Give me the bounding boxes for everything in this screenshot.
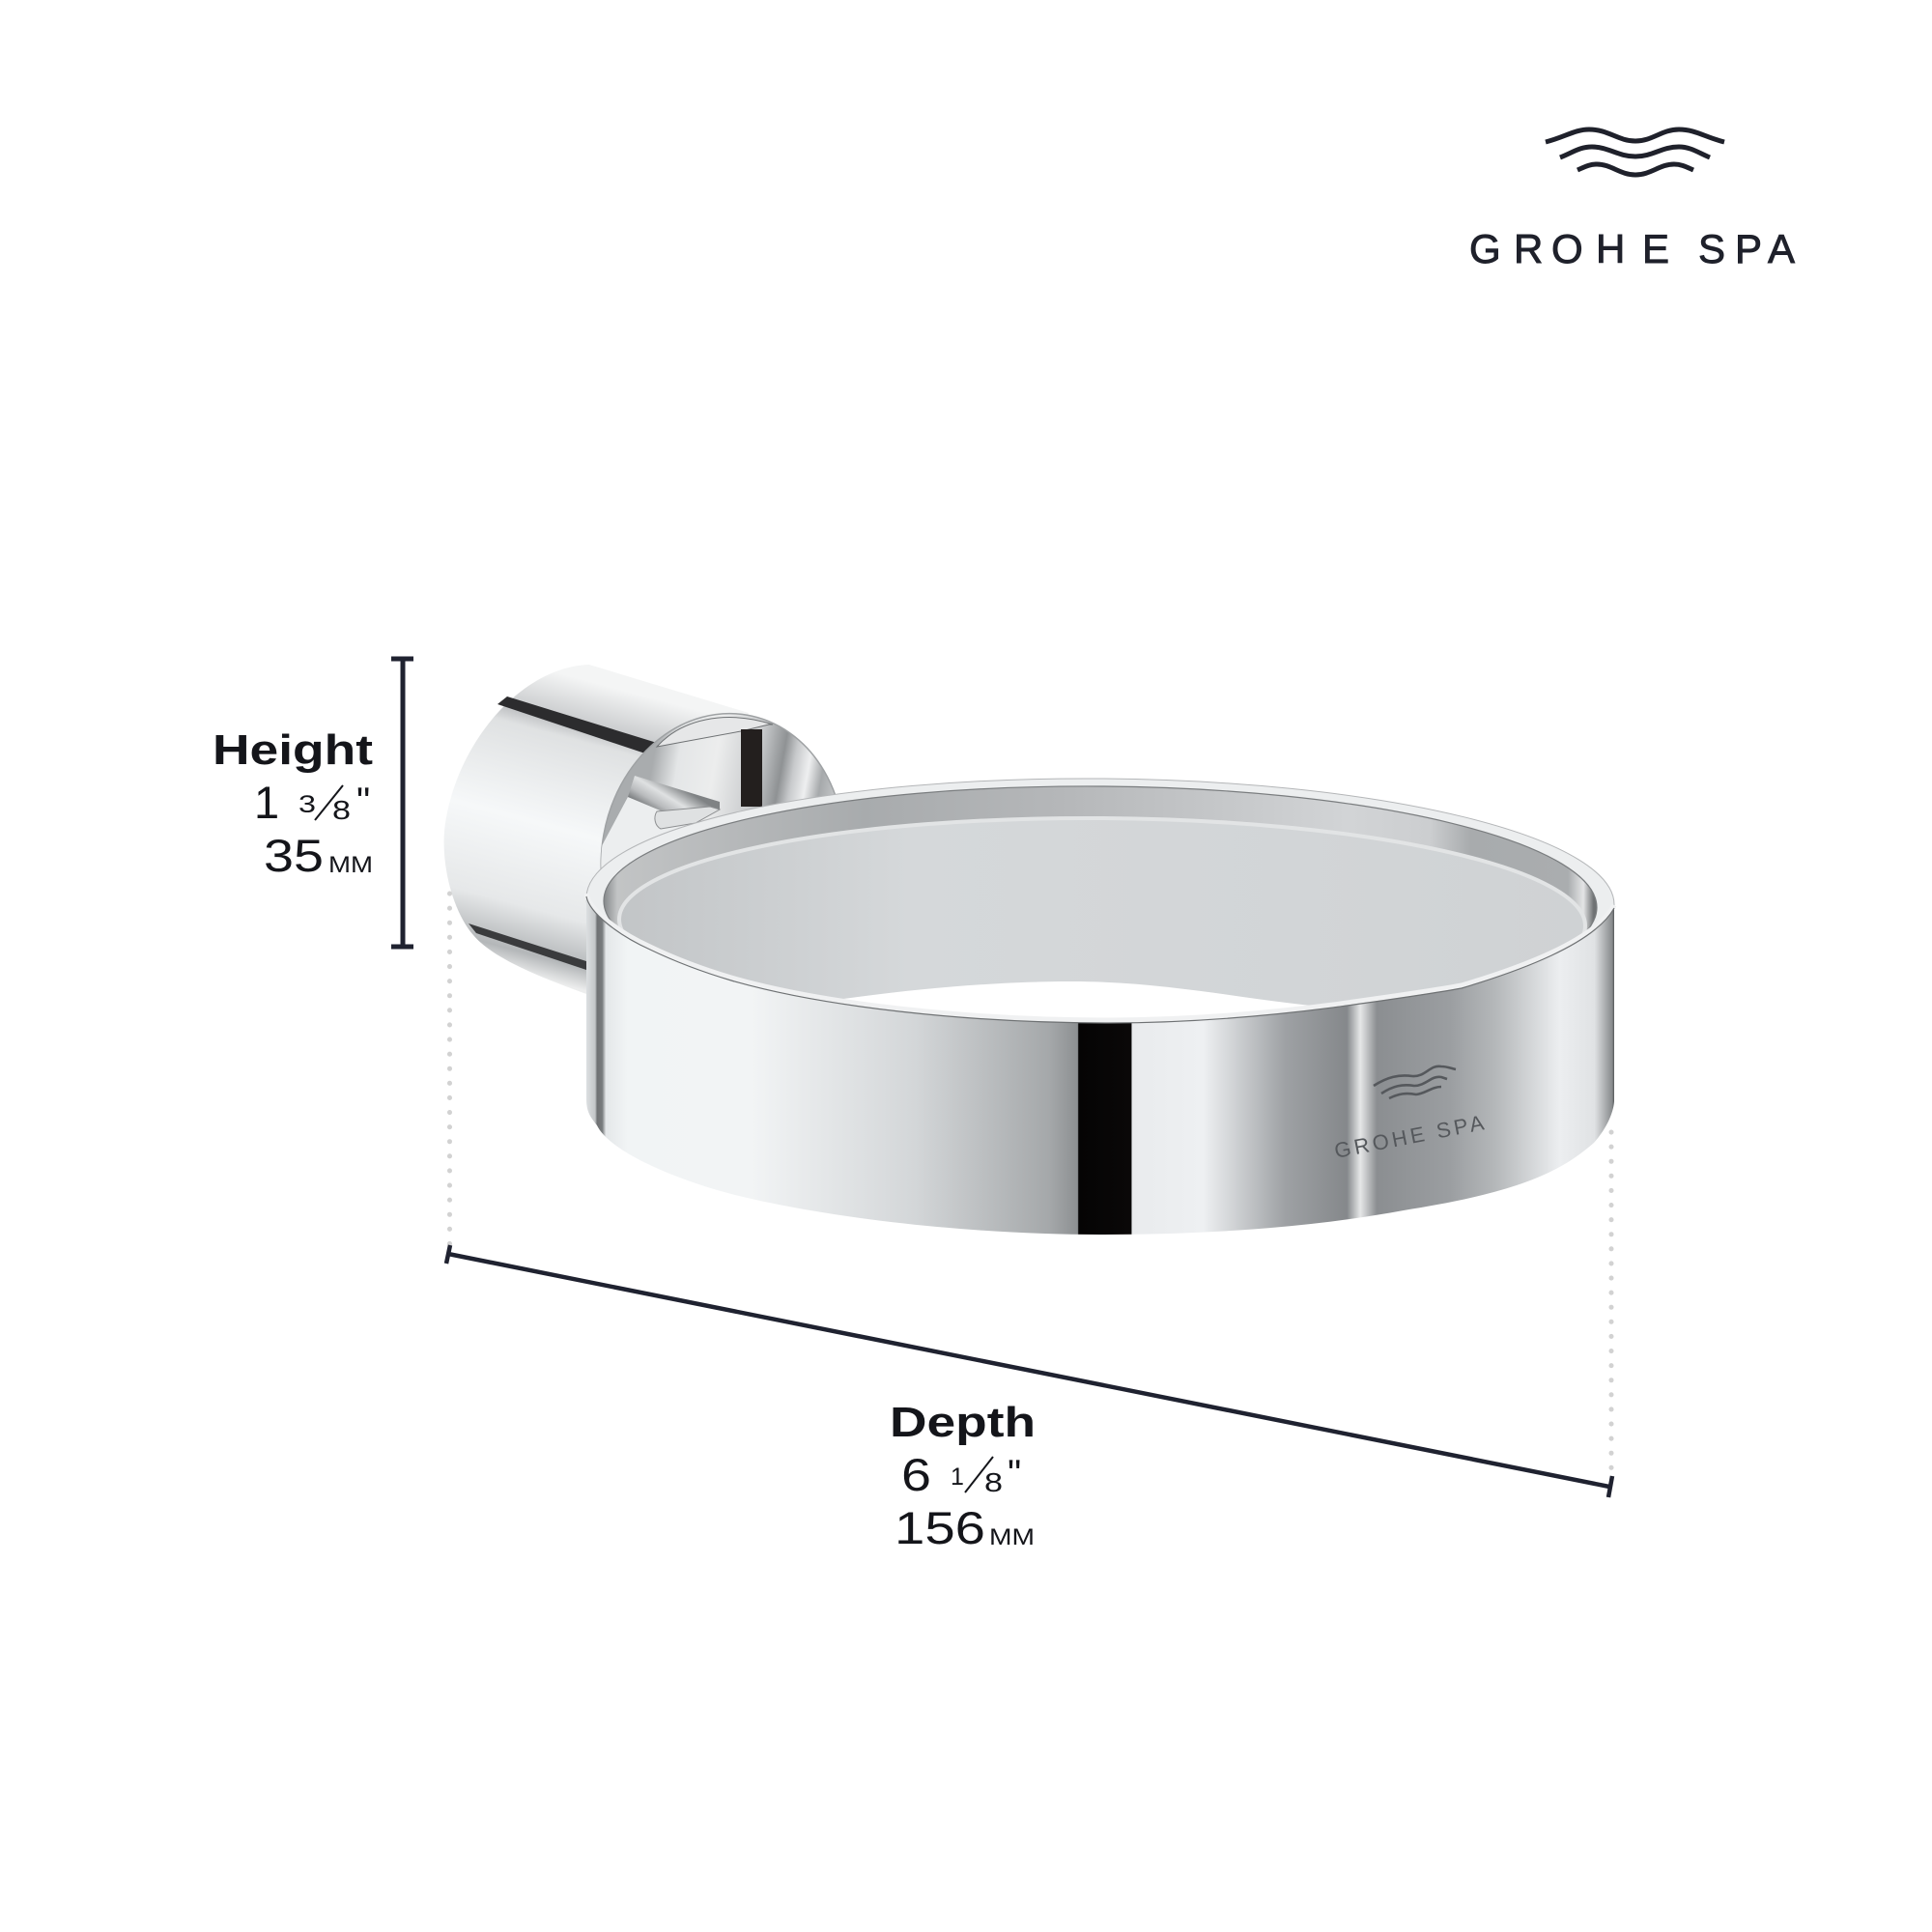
icon: waves [1546, 129, 1724, 175]
label: depth: 8 [984, 1467, 1003, 1497]
label: height [213, 726, 373, 881]
label: depth [890, 1399, 1036, 1553]
disc interior [589, 718, 773, 869]
label: depth: MM [989, 1524, 1035, 1550]
engraved wordmark: GROHE SPA [1332, 1110, 1486, 1163]
label: height: " [356, 781, 370, 823]
label: depth: 6 [901, 1449, 931, 1500]
reflection: upper dark stripe [497, 696, 657, 753]
label: depth: 156 [895, 1502, 985, 1553]
rim lip [585, 775, 1615, 1028]
label: depth: 1 [951, 1463, 964, 1491]
height dimension bar [391, 659, 413, 947]
dotted guide: left [447, 894, 452, 1244]
label: height: 35 [264, 830, 324, 881]
front wall [586, 896, 1614, 1235]
label: height: 8 [332, 795, 351, 825]
dark reflection band [741, 729, 762, 807]
lower left panel [601, 797, 667, 868]
label: height: 1 [254, 777, 279, 828]
reflection: lower dark stripe [469, 923, 589, 971]
label: depth: " [1008, 1453, 1021, 1495]
white opening below the glass [843, 981, 1350, 1028]
engraved logo on ring [1332, 1066, 1486, 1163]
front lip [586, 894, 1614, 1020]
logo wordmark: GROHE SPA [1469, 226, 1795, 271]
dotted guide: right [1609, 1132, 1613, 1468]
wall mount opening disc [579, 695, 867, 1017]
product: wall mount cylinder [444, 665, 836, 994]
product: soap dish ring [585, 775, 1615, 1235]
engraved waves [1374, 1066, 1456, 1098]
support rod [628, 776, 720, 811]
depth dimension line [446, 1245, 1612, 1497]
frosted glass plate [618, 815, 1586, 1030]
upper reflection wedge [657, 718, 773, 747]
label: depth: Depth [890, 1399, 1036, 1446]
label: height: Height [213, 726, 373, 774]
label: height: MM [328, 852, 373, 878]
label: height: 3 [298, 791, 316, 818]
inner wall [603, 782, 1598, 1026]
logo: Grohe Spa [1469, 129, 1795, 271]
